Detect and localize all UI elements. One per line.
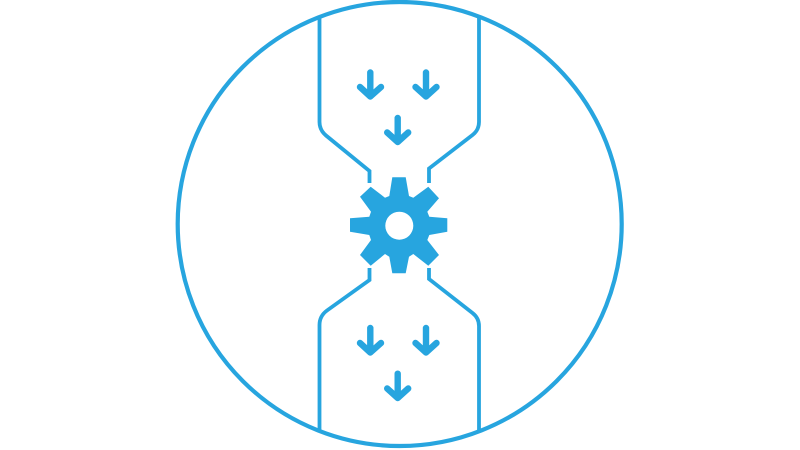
arrow: lower right: [416, 328, 436, 352]
outer circle: [178, 2, 622, 446]
lower funnel outline: [320, 268, 479, 431]
lower arrows: [360, 328, 436, 398]
arrow: upper center: [387, 118, 408, 142]
upper arrows: [360, 72, 436, 142]
icon: gear: [350, 177, 447, 273]
arrow: upper right: [416, 72, 436, 96]
arrow: lower center: [387, 374, 408, 398]
arrow: lower left: [360, 328, 381, 352]
arrow: upper left: [360, 72, 381, 96]
upper funnel outline: [320, 17, 479, 183]
